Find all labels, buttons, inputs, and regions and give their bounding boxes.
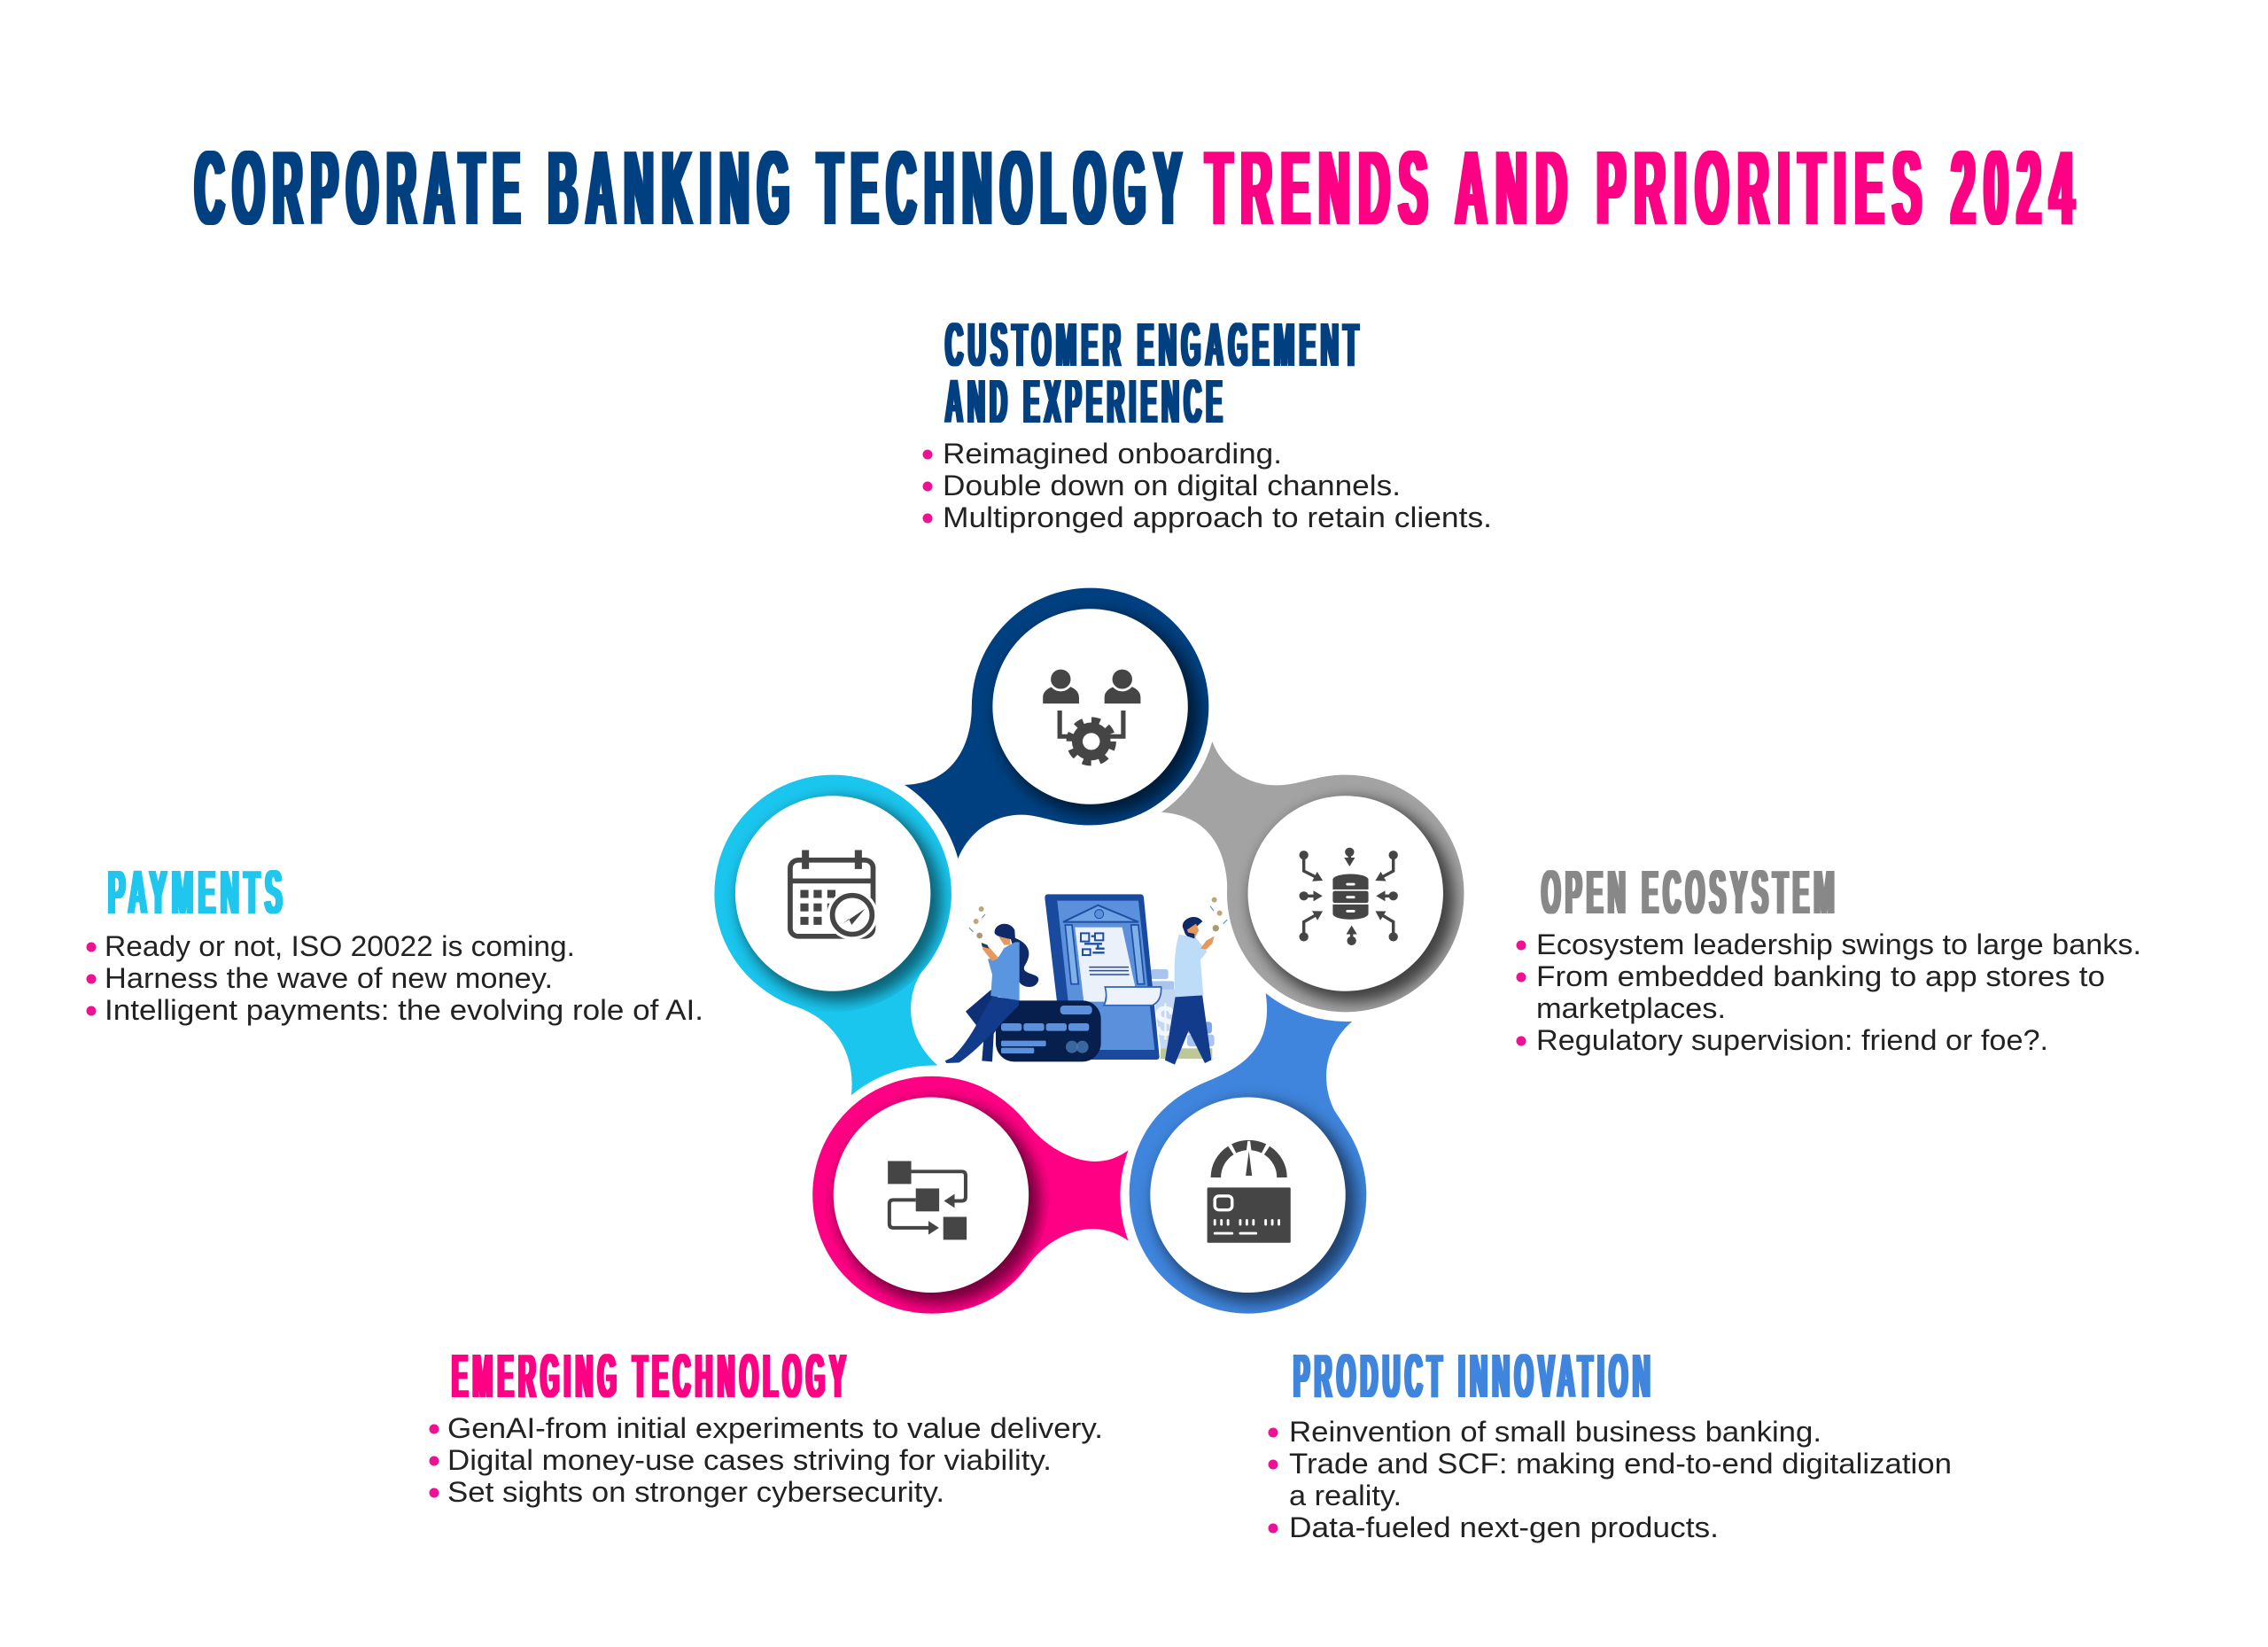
text block: payments: Intelligent payments: the evolving role of AI. [105,994,703,1026]
text block: payments: Ready or not, ISO 20022 is coming. [105,930,575,962]
text block: open ecosystem: marketplaces. [1536,992,1726,1024]
man with phone [1165,897,1227,1065]
node: cyan payments [714,775,951,1095]
text block: emerging technology: Set sights on stronger cybersecurity. [447,1476,944,1508]
text block: payments: PAYMENTS [108,858,287,927]
coin stacks and dollar bag: $ [1155,997,1176,1046]
pentagon ring diagram [714,588,1464,1314]
text block: emerging technology [429,1341,1103,1508]
text block: product innovation: PRODUCT INNOVATION [1293,1341,1655,1410]
credit card [996,1000,1101,1061]
text block: payments: Harness the wave of new money. [105,962,553,994]
coin stacks and dollar bag [1151,969,1215,1059]
text block: product innovation: a reality. [1289,1480,1402,1511]
text block: product innovation [1269,1341,1952,1543]
woman with phone [945,906,1038,1063]
text block: open ecosystem: Ecosystem leadership swings to large banks. [1536,928,2141,960]
text block: product innovation: Trade and SCF: making end-to-end digitalization [1289,1448,1952,1480]
text block: emerging technology: EMERGING TECHNOLOGY [452,1341,850,1410]
text block: open ecosystem [1517,858,2141,1056]
text block: customer engagement and experience: Reimagined onboarding. [943,438,1282,470]
text block: open ecosystem: From embedded banking to app stores to [1536,960,2105,992]
tablet [1045,894,1161,1060]
text block: emerging technology: Digital money-use cases striving for viability. [447,1444,1052,1476]
node: pink emerging technology [812,1076,1129,1314]
centre illustration: bank tablet, card and two people [945,894,1227,1065]
node: grey open ecosystem [1161,742,1464,1012]
text block: customer engagement and experience: AND EXPERIENCE [945,367,1227,436]
node: blue product innovation [1130,993,1366,1314]
icon: people and gear [1043,668,1140,763]
text block: customer engagement and experience [923,310,1492,533]
text block: open ecosystem: Regulatory supervision: friend or foe?. [1536,1024,2048,1056]
text block: customer engagement and experience: Double down on digital channels. [943,470,1401,501]
node: navy customer engagement [905,588,1208,858]
icon: process flow [888,1161,967,1239]
text block: customer engagement and experience: Multipronged approach to retain clients. [943,501,1492,533]
icon: gauge and card [1208,1141,1291,1243]
text block: customer engagement and experience: CUSTOMER ENGAGEMENT [945,310,1363,379]
text block: payments [87,858,703,1026]
icon: database with arrows [1300,848,1398,945]
text block: emerging technology: GenAI-from initial experiments to value delivery. [447,1412,1103,1444]
text block: product innovation: Data-fueled next-gen products. [1289,1511,1719,1543]
icon: calendar with gauge [788,851,878,940]
text block: product innovation: Reinvention of small business banking. [1289,1416,1821,1448]
